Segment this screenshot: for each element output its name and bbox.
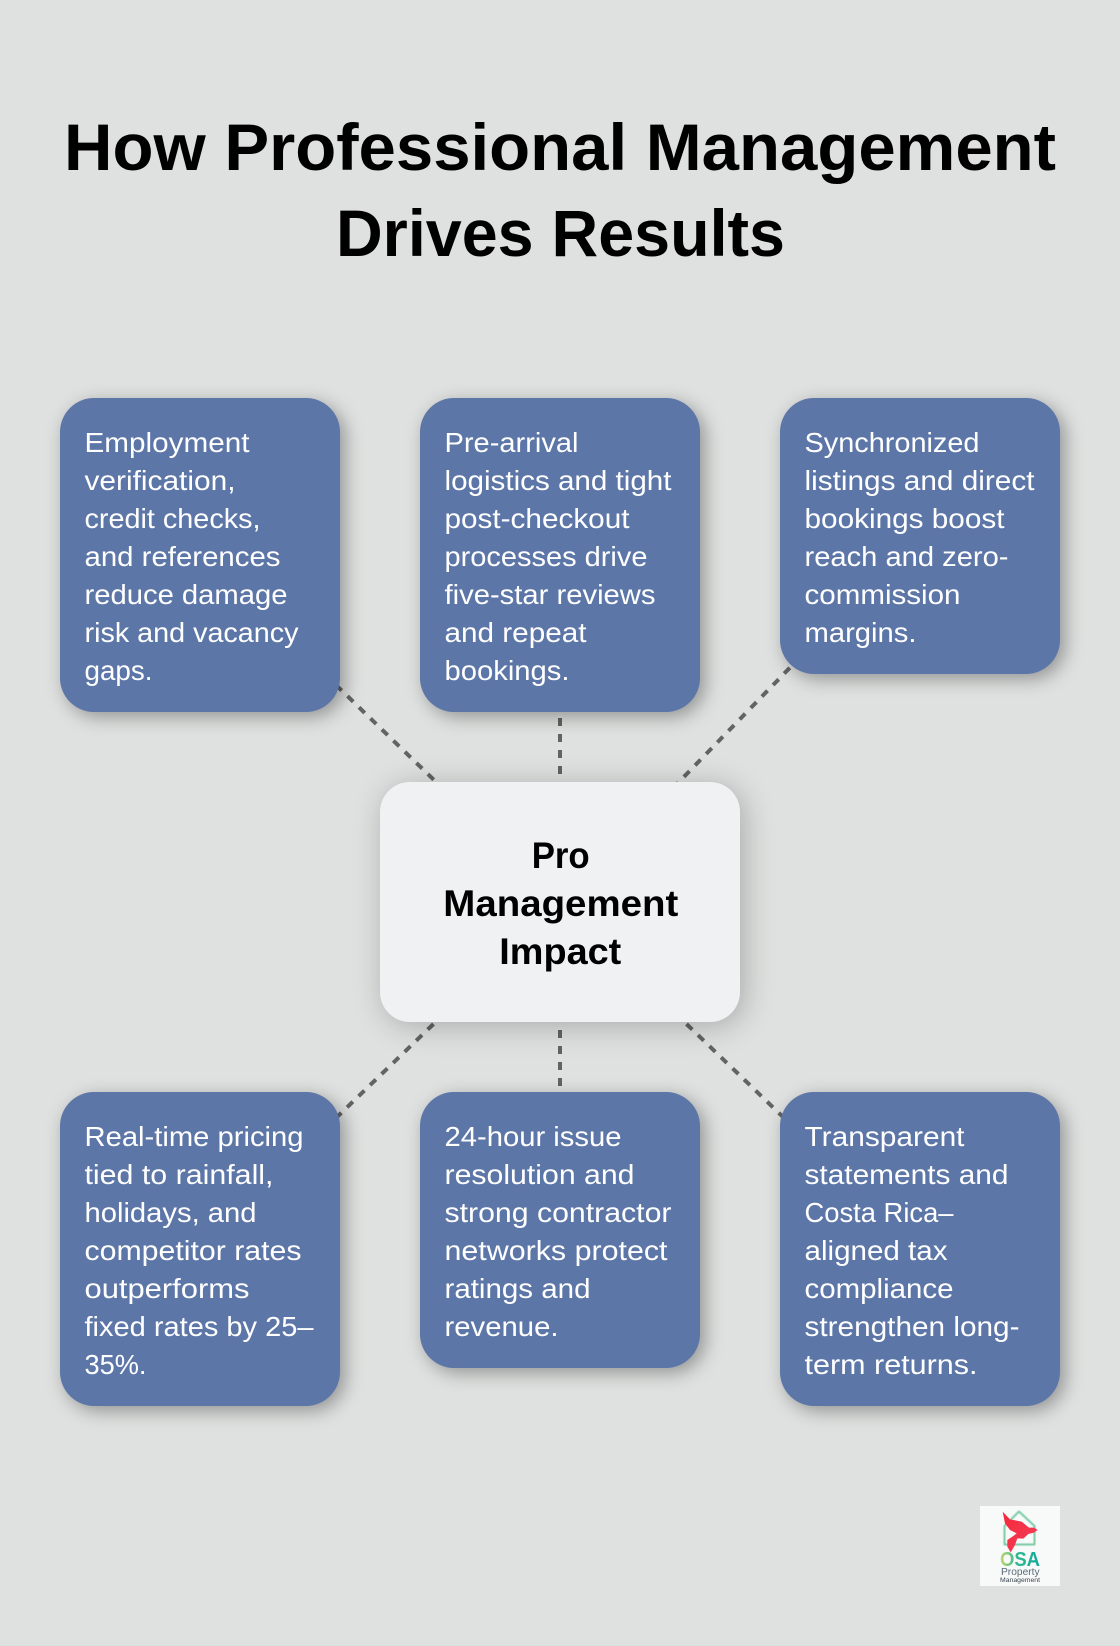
- panel: listings and bookings: bookings boost: [804, 503, 1005, 534]
- panel: tenant screening: verification,: [84, 465, 236, 496]
- panel: dynamic pricing: holidays, and: [84, 1197, 256, 1228]
- panel: centre hub: Pro: [532, 835, 590, 876]
- connector: top-left card to centre: [336, 685, 434, 780]
- panel: dynamic pricing: competitor rates: [84, 1235, 302, 1266]
- connector: bottom-right card to centre: [686, 1024, 784, 1118]
- panel: issue resolution: strong contractor: [444, 1197, 672, 1228]
- panel: tenant screening: Employment: [84, 427, 250, 458]
- panel: tenant screening: gaps.: [84, 655, 152, 686]
- panel: guest logistics: bookings.: [444, 655, 570, 686]
- panel: dynamic pricing: 35%.: [84, 1349, 146, 1380]
- panel: guest logistics: five-star reviews: [444, 579, 656, 610]
- panel: guest logistics: processes drive: [444, 541, 648, 572]
- logo: OSA Property Management: [980, 1506, 1060, 1586]
- logo: OSA Property Management: Management: [1000, 1577, 1040, 1584]
- panel: listings and bookings: commission: [804, 579, 960, 610]
- panel: dynamic pricing: [60, 1092, 340, 1406]
- panel: dynamic pricing: outperforms: [84, 1273, 250, 1304]
- panel: tenant screening: and references: [84, 541, 280, 572]
- connector: bottom-left card to centre: [336, 1024, 434, 1118]
- panel: issue resolution: 24-hour issue: [444, 1121, 622, 1152]
- panel: issue resolution: [420, 1092, 700, 1368]
- panel: statements and tax compliance: [780, 1092, 1060, 1406]
- panel: listings and bookings: Synchronized: [804, 427, 980, 458]
- panel: statements and tax compliance: aligned tax: [804, 1235, 948, 1266]
- panel: tenant screening: [60, 398, 340, 712]
- panel: tenant screening: credit checks,: [84, 503, 260, 534]
- panel: statements and tax compliance: term returns.: [804, 1349, 978, 1380]
- connector: top-middle card to centre: [558, 718, 562, 774]
- panel: statements and tax compliance: compliance: [804, 1273, 954, 1304]
- panel: issue resolution: networks protect: [444, 1235, 668, 1266]
- panel: statements and tax compliance: Transparent: [804, 1121, 965, 1152]
- panel: listings and bookings: margins.: [804, 617, 916, 648]
- panel: guest logistics: [420, 398, 700, 712]
- panel: centre hub: [380, 782, 740, 1022]
- connector: bottom-middle card to centre: [558, 1030, 562, 1086]
- title: [64, 110, 1056, 270]
- panel: dynamic pricing: Real-time pricing: [84, 1121, 304, 1152]
- panel: guest logistics: Pre-arrival: [444, 427, 578, 458]
- title: How Professional Management: [64, 110, 1056, 184]
- panel: guest logistics: post-checkout: [444, 503, 630, 534]
- panel: listings and bookings: listings and direct: [804, 465, 1035, 496]
- panel: listings and bookings: [780, 398, 1060, 674]
- panel: tenant screening: risk and vacancy: [84, 617, 298, 648]
- panel: guest logistics: and repeat: [444, 617, 587, 648]
- panel: statements and tax compliance: Costa Rica–: [804, 1197, 954, 1228]
- panel: tenant screening: reduce damage: [84, 579, 288, 610]
- panel: guest logistics: logistics and tight: [444, 465, 672, 496]
- title: Drives Results: [336, 196, 785, 270]
- connector: top-right card to centre: [674, 668, 790, 786]
- logo: OSA Property Management: Property: [1001, 1566, 1040, 1578]
- panel: centre hub: Impact: [499, 931, 621, 972]
- panel: issue resolution: revenue.: [444, 1311, 558, 1342]
- panel: dynamic pricing: tied to rainfall,: [84, 1159, 274, 1190]
- panel: centre hub: Management: [443, 883, 678, 924]
- logo: OSA Property Management: OSA: [1000, 1549, 1040, 1571]
- panel: issue resolution: resolution and: [444, 1159, 634, 1190]
- panel: dynamic pricing: fixed rates by 25–: [84, 1311, 314, 1342]
- panel: listings and bookings: reach and zero-: [804, 541, 1008, 572]
- panel: statements and tax compliance: statements and: [804, 1159, 1008, 1190]
- panel: statements and tax compliance: strengthen long-: [804, 1311, 1020, 1342]
- panel: issue resolution: ratings and: [444, 1273, 590, 1304]
